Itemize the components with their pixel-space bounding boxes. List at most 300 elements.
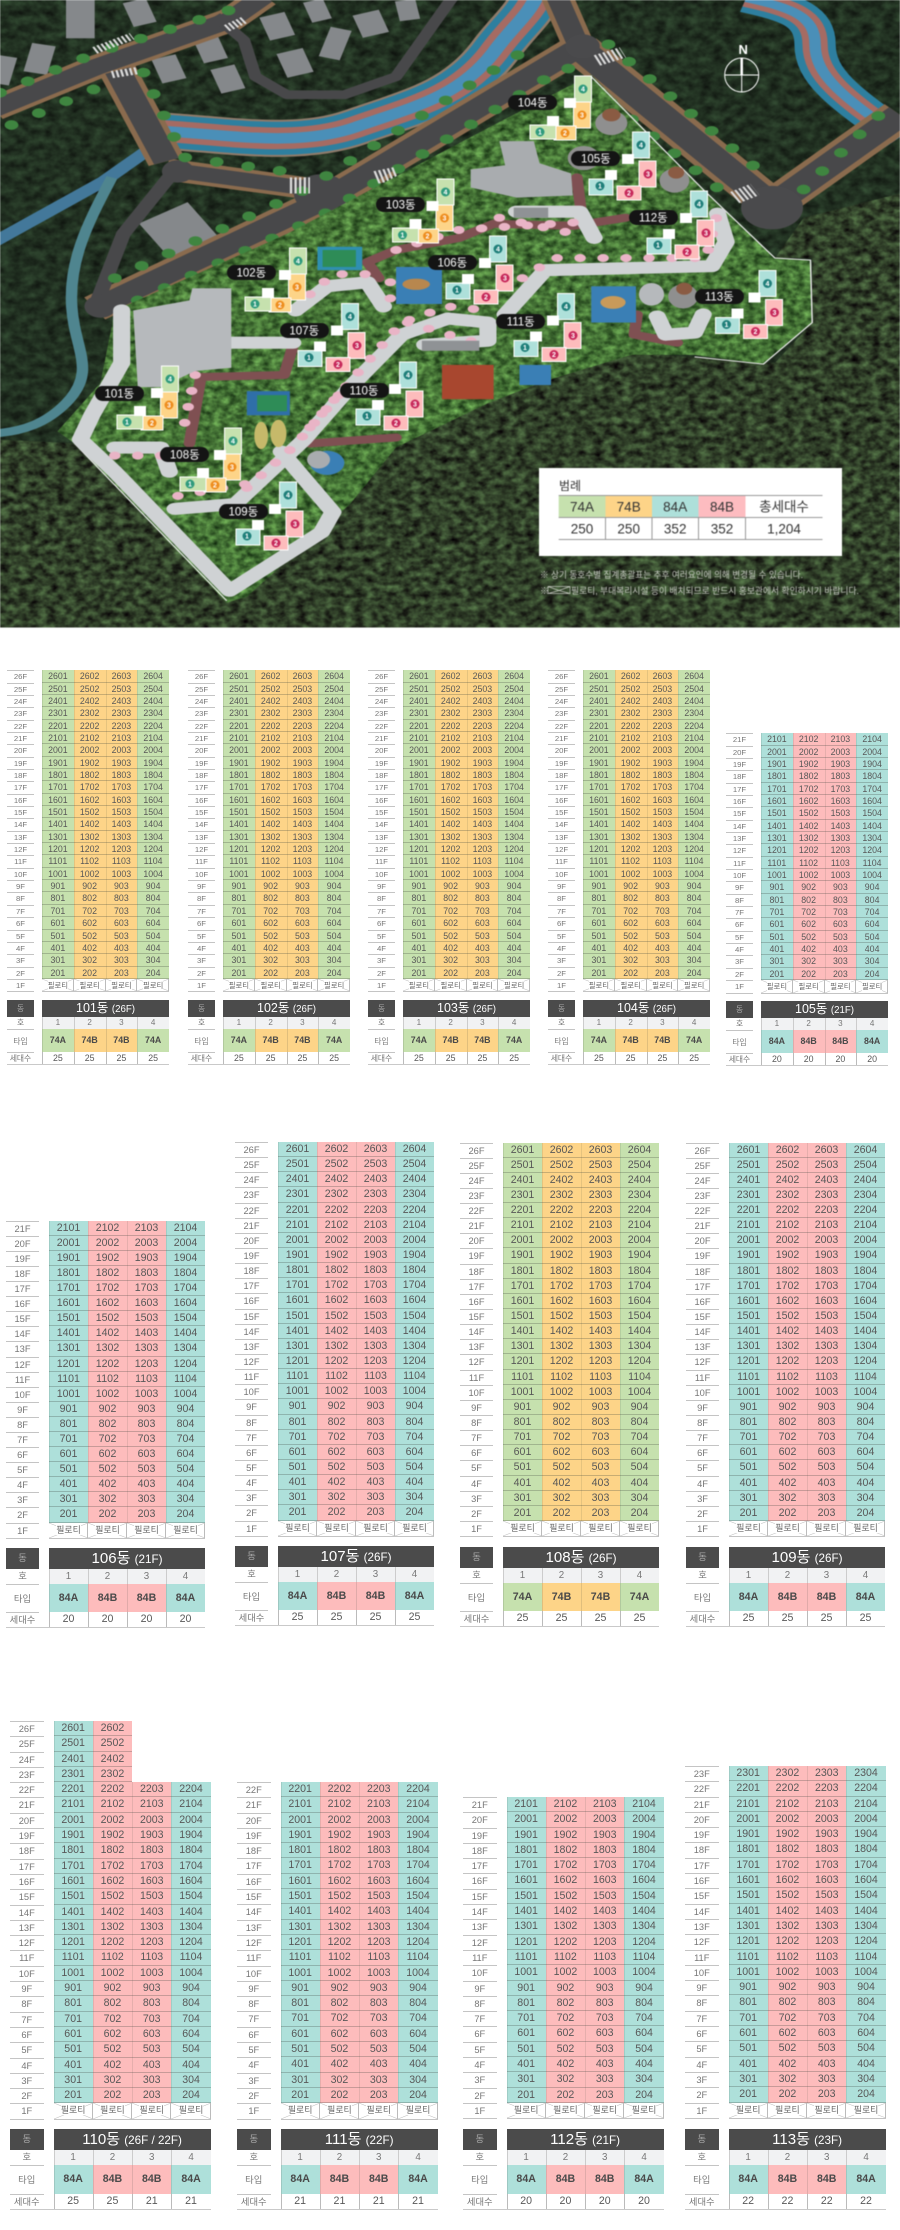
building 108 table: 1101 (511, 1371, 534, 1383)
building 112 table: 2003 (593, 1813, 617, 1825)
building 110 table: 1703 (140, 1860, 164, 1872)
tower 101: 3 (167, 402, 171, 410)
building 112 table: 1001 (514, 1966, 538, 1978)
legend box (539, 468, 842, 556)
building 102 table: 903 (295, 881, 310, 891)
building 111 table: 1404 (406, 1905, 430, 1917)
building 107 table: 1 (295, 1569, 300, 1580)
building 108 table: 8F (471, 1418, 482, 1428)
building 103 table: 1204 (504, 844, 524, 854)
building 112 table: 84A (634, 2173, 654, 2185)
building 104 table: 803 (655, 893, 670, 903)
building name pills: 101동 (105, 388, 134, 400)
building 109 table: 4 (863, 1570, 868, 1581)
building 103 table: 9F (377, 882, 386, 891)
building 108 table: 603 (592, 1446, 609, 1458)
building 107 table: 2403 (364, 1173, 387, 1185)
building 111 table: 13F (246, 1923, 262, 1933)
building 107 table: 203 (367, 1506, 384, 1518)
building 112 table: 1604 (632, 1874, 656, 1886)
building 104 table: 1803 (653, 770, 672, 780)
building 113 table: 702 (779, 2012, 796, 2024)
building 104 table: 2501 (589, 684, 609, 694)
building 102 table: 호 (198, 1018, 205, 1027)
building 103 table: 304 (507, 955, 521, 965)
building 109 table: 25F (694, 1161, 711, 1171)
building 104 table: 301 (592, 955, 606, 965)
building 104 table: 74A (591, 1035, 607, 1045)
building 106 table: 2 (105, 1571, 110, 1582)
building 110 table: 2102 (101, 1798, 124, 1810)
building 106 table: 20F (14, 1239, 31, 1249)
building 110 table: 1904 (179, 1829, 203, 1841)
building 102 table: 필로티 (324, 981, 344, 990)
building 107 table: 23F (243, 1190, 260, 1200)
building 102 table: 23F (195, 709, 208, 718)
building 111 table: 11F (246, 1953, 261, 1963)
building 107 table: 2302 (325, 1188, 348, 1200)
building 107 table: 3 (373, 1569, 378, 1580)
building 105 table: 4F (735, 945, 744, 954)
building 106 table: 필로티 (95, 1525, 120, 1535)
building 102 table: 502 (263, 931, 278, 941)
building 109 table: 1904 (854, 1249, 877, 1261)
building 108 table: 602 (553, 1446, 570, 1458)
building 113 table: 84B (778, 2173, 797, 2185)
building 104 table: 104동 (26F) (617, 1001, 676, 1015)
building 101 table: 9F (16, 882, 25, 891)
building 109 table: 1804 (854, 1265, 877, 1277)
building 113 table: 2202 (776, 1782, 799, 1794)
building 107 table: 2203 (364, 1204, 387, 1216)
building 102 table: 1204 (324, 844, 344, 854)
building 110 table: 801 (64, 1997, 82, 2009)
building 113 table: 1301 (736, 1920, 760, 1932)
building 102 table: 15F (195, 808, 208, 817)
building 108 table: 503 (592, 1461, 609, 1473)
building 105 table: 2103 (831, 734, 850, 744)
building 102 table: 904 (327, 881, 341, 891)
building 104 table: 802 (623, 893, 638, 903)
building 113 table: 1103 (815, 1951, 838, 1963)
building 111 table: 304 (409, 2074, 427, 2086)
building 110 table: 1604 (179, 1875, 203, 1887)
building 108 table: 17F (468, 1282, 485, 1292)
building 103 table: 5F (377, 932, 386, 941)
building 102 table: 1203 (293, 844, 312, 854)
building 113 table: 10F (694, 1968, 710, 1978)
building 107 table: 5F (246, 1463, 257, 1473)
tower 108 (180, 428, 242, 492)
tower 101: 1 (125, 420, 129, 426)
building 101 table: 701 (51, 906, 65, 916)
building 108 table: 501 (514, 1461, 531, 1473)
building 103 table: 2303 (473, 708, 492, 718)
building 104 table: 2603 (653, 671, 672, 681)
building 112 table: 3 (602, 2152, 607, 2163)
building 110 table: 25F (19, 1739, 35, 1749)
building 101 table: 204 (146, 968, 160, 978)
building 113 table: 1901 (736, 1828, 760, 1840)
building 103 table: 1304 (504, 832, 524, 842)
building 107 table: 1004 (403, 1385, 426, 1397)
building 110 table: 11F (19, 1953, 34, 1963)
building 102 table: 1904 (324, 758, 344, 768)
building 106 table: 203 (138, 1508, 155, 1520)
building 105 table: 202 (801, 969, 816, 979)
building 101 table: 25 (148, 1053, 158, 1063)
building 103 table: 1404 (504, 819, 524, 829)
building 104 table: 1103 (653, 856, 672, 866)
building 108 table: 1003 (589, 1386, 612, 1398)
building 111 table: 204 (409, 2089, 427, 2101)
building 105 table: 1804 (862, 771, 882, 781)
building 102 table: 26F (195, 672, 208, 681)
building 106 table: 2103 (135, 1222, 158, 1234)
building 102 table: 2402 (261, 696, 280, 706)
building 109 table: 1601 (737, 1295, 760, 1307)
tower 113 (716, 270, 782, 338)
building 104 table: 74B (654, 1035, 670, 1045)
building 103 table: 2604 (504, 671, 524, 681)
building 105 table: 필로티 (798, 982, 819, 991)
building 102 table: 2F (197, 969, 206, 978)
building 107 table: 1602 (325, 1294, 348, 1306)
building 101 table: 2204 (143, 721, 163, 731)
building 109 table: 403 (818, 1477, 835, 1489)
building 104 table: 1401 (589, 819, 609, 829)
building 103 table: 16F (375, 796, 388, 805)
building 105 table: 필로티 (830, 982, 851, 991)
building 109 table: 1403 (815, 1325, 838, 1337)
building 105 table: 1F (735, 982, 744, 991)
building 102 table: 1101 (229, 856, 248, 866)
building 113 table: 404 (857, 2058, 875, 2070)
building 102 table: 2301 (229, 708, 249, 718)
building 108 table: 1404 (628, 1325, 651, 1337)
building 103 table: 타입 (374, 1037, 389, 1046)
building 108 table: 2203 (589, 1204, 612, 1216)
building 109 table: 22F (694, 1206, 711, 1216)
building 113 table: 23F (694, 1769, 710, 1779)
building 110 table: 1501 (61, 1890, 85, 1902)
building 108 table: 25 (517, 1612, 528, 1624)
building 103 table: 20F (375, 746, 388, 755)
building 104 table: 1403 (653, 819, 672, 829)
building 113 table: 704 (857, 2012, 875, 2024)
tower 106 (446, 236, 513, 304)
building 105 table: 84B (801, 1036, 817, 1046)
building 111 table: 6F (248, 2030, 259, 2040)
building 103 table: 1704 (504, 782, 524, 792)
building 101 table: 2503 (112, 684, 131, 694)
building 107 table: 11F (244, 1372, 259, 1382)
building 112 table: 1603 (593, 1874, 617, 1886)
building 103 table: 13F (375, 833, 388, 842)
building 108 table: 1501 (511, 1310, 534, 1322)
building 105 table: 601 (770, 919, 784, 929)
building 109 table: 25 (821, 1612, 832, 1624)
building 108 table: 1303 (589, 1340, 612, 1352)
building 101 table: 호 (17, 1018, 24, 1027)
building 101 table: 15F (14, 808, 27, 817)
building 109 table: 1703 (815, 1280, 838, 1292)
building 110 table: 1202 (101, 1936, 124, 1948)
building 112 table: 503 (596, 2043, 614, 2055)
building 110 table: 1902 (101, 1829, 124, 1841)
tower 109: 4 (286, 492, 290, 500)
building 107 table: 2301 (286, 1188, 309, 1200)
building 104 table: 1301 (589, 832, 609, 842)
building 105 table: 3 (838, 1019, 843, 1028)
building 103 table: 1701 (409, 782, 429, 792)
building 101 table: 74B (82, 1035, 98, 1045)
building 111 table: 2004 (406, 1814, 430, 1826)
building 106 table: 13F (14, 1344, 31, 1354)
building 103 table: 1501 (409, 807, 429, 817)
building 111 table: 세대수 (241, 2197, 267, 2207)
tower 109: 2 (274, 540, 278, 548)
building 108 table: 74B (552, 1591, 571, 1603)
building 101 table: 74B (113, 1035, 129, 1045)
building 107 table: 2001 (286, 1234, 309, 1246)
building 103 table: 2 (448, 1018, 453, 1027)
legend box: 범례 (559, 479, 581, 493)
building 112 table: 타입 (471, 2175, 488, 2185)
building 104 table: 2102 (621, 733, 640, 743)
building 108 table: 14F (468, 1327, 485, 1337)
building 103 table: 1504 (504, 807, 524, 817)
building 110 table: 504 (182, 2043, 200, 2055)
building 107 table: 25 (370, 1611, 381, 1623)
building 112 table: 702 (557, 2012, 574, 2024)
building 112 table: 1701 (514, 1859, 538, 1871)
building 113 table: 1102 (776, 1951, 799, 1963)
building 111 table: 17F (246, 1861, 262, 1871)
building 110 table: 1101 (62, 1951, 85, 1963)
building 113 table: 1601 (736, 1874, 760, 1886)
building 113 table: 9F (696, 1983, 707, 1993)
building 104 table: 2203 (653, 721, 672, 731)
building 103 table: 2502 (441, 684, 460, 694)
building 101 table: 302 (82, 955, 97, 965)
building 109 table: 8F (697, 1418, 708, 1428)
building 106 table: 204 (177, 1508, 194, 1520)
building 106 table: 702 (99, 1433, 116, 1445)
building 107 table: 2601 (286, 1143, 309, 1155)
tower 109 (236, 482, 303, 550)
building 109 table: 1001 (737, 1386, 760, 1398)
building 107 table: 1902 (325, 1249, 348, 1261)
building 106 table: 1903 (135, 1252, 158, 1264)
building 101 table: 1603 (112, 795, 131, 805)
building 101 table: 903 (114, 881, 129, 891)
building 101 table: 1901 (48, 758, 68, 768)
building 107 table: 18F (243, 1266, 260, 1276)
building 101 table: 502 (82, 931, 97, 941)
building 108 table: 필로티 (627, 1523, 652, 1533)
garden paths (80, 177, 726, 591)
building 111 table: 702 (331, 2012, 348, 2024)
building 113 table: 8F (696, 1998, 707, 2008)
building 113 table: 호 (697, 2152, 706, 2162)
building 101 table: 904 (146, 881, 160, 891)
tower 111: 2 (552, 352, 556, 359)
tower 101 (117, 366, 178, 430)
building 107 table: 2503 (364, 1158, 387, 1170)
building 108 table: 호 (472, 1570, 481, 1580)
building 101 table: 202 (82, 968, 97, 978)
building 112 table: 84B (556, 2173, 575, 2185)
building 108 table: 1102 (550, 1371, 573, 1383)
building 103 table: 1F (377, 981, 386, 990)
building 105 table: 404 (865, 944, 879, 954)
building 103 table: 21F (375, 734, 388, 743)
building 113 table: 401 (739, 2058, 757, 2070)
building 106 table: 501 (60, 1463, 77, 1475)
building 108 table: 1803 (589, 1265, 612, 1277)
building 104 table: 902 (623, 881, 638, 891)
building 113 table: 1501 (736, 1889, 760, 1901)
building 102 table: 302 (263, 955, 278, 965)
building 112 table: 21F (472, 1800, 488, 1810)
building 111 table: 402 (331, 2058, 348, 2070)
building 110 table: 202 (104, 2089, 121, 2101)
building 112 table: 1103 (593, 1951, 616, 1963)
building 110 table: 18F (19, 1846, 35, 1856)
building 110 table: 1103 (140, 1951, 163, 1963)
building 112 table: 604 (635, 2027, 653, 2039)
building 113 table: 301 (739, 2073, 757, 2085)
building 102 table: 1503 (293, 807, 312, 817)
building 113 table: 1203 (815, 1935, 839, 1947)
building 113 table: 1904 (854, 1828, 878, 1840)
building 108 table: 803 (592, 1416, 609, 1428)
tower 109: 3 (293, 522, 297, 528)
building 107 table: 84B (366, 1590, 385, 1602)
building 106 table: 2003 (135, 1237, 158, 1249)
building 102 table: 604 (327, 918, 341, 928)
building 108 table: 1601 (511, 1295, 534, 1307)
building 105 table: 1404 (862, 821, 882, 831)
building 101 table: 1704 (143, 782, 163, 792)
building 103 table: 필로티 (504, 981, 524, 990)
building 108 table: 1204 (628, 1355, 651, 1367)
building 102 table: 1902 (261, 758, 280, 768)
building 108 table: 902 (553, 1401, 570, 1413)
building 107 table: 14F (243, 1327, 260, 1337)
building 113 table: 804 (857, 1996, 875, 2008)
building 112 table: 1101 (515, 1951, 538, 1963)
building 107 table: 1202 (325, 1355, 348, 1367)
building 112 table: 801 (517, 1997, 535, 2009)
building 105 table: 2004 (862, 747, 882, 757)
building 105 table: 502 (801, 932, 816, 942)
building 108 table: 2001 (511, 1234, 534, 1246)
building name pills: 106동 (438, 258, 467, 270)
building 110 table: 15F (19, 1892, 35, 1902)
building 105 table: 동 (736, 1005, 743, 1014)
building 106 table: 304 (177, 1493, 194, 1505)
building 104 table: 타입 (554, 1037, 569, 1046)
building 101 table: 18F (14, 771, 27, 780)
tower 107: 2 (336, 362, 340, 369)
building 102 table: 74A (231, 1035, 247, 1045)
building 110 table: 4 (188, 2152, 194, 2163)
building 112 table: 701 (517, 2012, 535, 2024)
building 113 table: 113동 (23F) (772, 2131, 842, 2148)
building 102 table: 25 (329, 1053, 339, 1063)
building 105 table: 403 (833, 944, 848, 954)
building 105 table: 5F (735, 933, 744, 942)
building 104 table: 2002 (621, 745, 640, 755)
building 112 table: 112동 (21F) (550, 2131, 620, 2148)
building 109 table: 1103 (815, 1371, 838, 1383)
building 112 table: 902 (557, 1982, 574, 1994)
building 108 table: 1103 (589, 1371, 612, 1383)
building 106 table: 701 (60, 1433, 77, 1445)
building 109 table: 1104 (854, 1371, 877, 1383)
building 105 table: 901 (770, 882, 784, 892)
building 104 table: 2103 (653, 733, 672, 743)
building 105 table: 702 (801, 907, 816, 917)
building 108 table: 2604 (628, 1144, 651, 1156)
building 103 table: 202 (443, 968, 458, 978)
building 111 table: 1203 (367, 1936, 391, 1948)
building 109 table: 13F (694, 1342, 711, 1352)
building 101 table: 702 (82, 906, 97, 916)
building 102 table: 1501 (229, 807, 249, 817)
building 106 table: 403 (138, 1478, 155, 1490)
building 105 table: 7F (735, 908, 744, 917)
building 110 table: 802 (104, 1997, 121, 2009)
building 107 table: 2602 (325, 1143, 348, 1155)
building 109 table: 2301 (737, 1189, 760, 1201)
building 104 table: 901 (592, 881, 606, 891)
building 107 table: 201 (289, 1506, 306, 1518)
building 110 table: 2203 (140, 1783, 164, 1795)
building 103 table: 2201 (409, 721, 429, 731)
building 106 table: 5F (17, 1465, 28, 1475)
building 108 table: 203 (592, 1507, 609, 1519)
building 107 table: 필로티 (285, 1523, 310, 1533)
building 104 table: 2004 (684, 745, 704, 755)
building 102 table: 74B (294, 1035, 310, 1045)
footnotes: 필로티, 부대복리시설 등이 배치되므로 반드시 홍보관에서 확인하시기 바랍니다. (571, 585, 859, 596)
building 108 table: 2004 (628, 1234, 651, 1246)
building 106 table: 1302 (96, 1342, 119, 1354)
building 107 table: 1901 (286, 1249, 309, 1261)
building 105 table: 1503 (831, 808, 850, 818)
building 101 table: 1402 (80, 819, 99, 829)
tower 101: 4 (168, 376, 172, 384)
building 102 table: 2303 (293, 708, 312, 718)
building 107 table: 2004 (403, 1234, 426, 1246)
building 113 table: 2302 (776, 1767, 799, 1779)
building 105 table: 2 (806, 1019, 811, 1028)
building 113 table: 22 (860, 2195, 872, 2207)
building 101 table: 1802 (80, 770, 99, 780)
building 113 table: 5F (696, 2044, 707, 2054)
building 112 table: 904 (635, 1982, 653, 1994)
building 109 table: 304 (857, 1492, 874, 1504)
building 110 table: 13F (19, 1923, 35, 1933)
building 112 table: 303 (596, 2073, 614, 2085)
building 107 table: 1203 (364, 1355, 387, 1367)
building 104 table: 603 (655, 918, 670, 928)
building 110 table: 19F (19, 1831, 35, 1841)
building 101 table: 23F (14, 709, 27, 718)
